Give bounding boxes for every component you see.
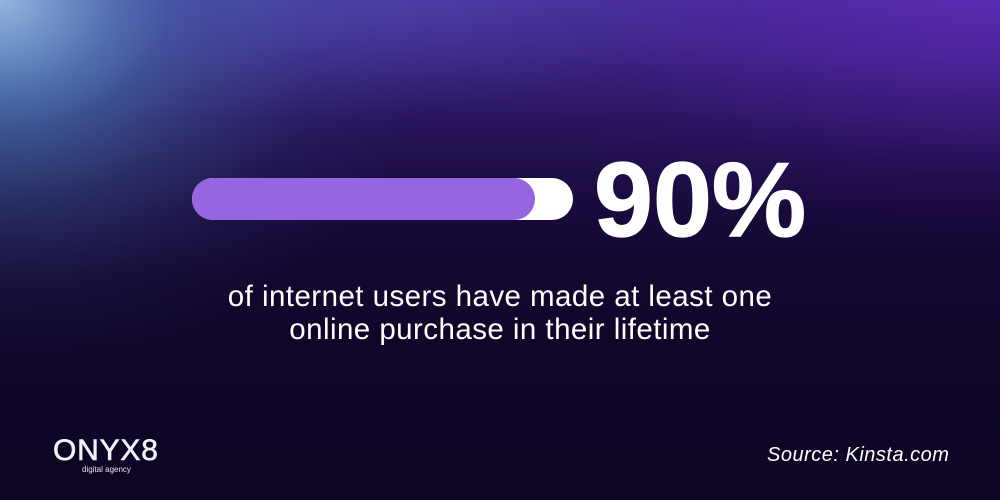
- logo: ONYX8 digital agency: [53, 434, 159, 474]
- description text: of internet users have made at least one: [228, 280, 772, 313]
- bar track: [192, 178, 573, 220]
- source note: Source: Kinsta.com: [767, 444, 949, 466]
- progress bar: [192, 178, 573, 220]
- bar fill 90%: [192, 178, 535, 220]
- big number: 90%: 90%: [594, 141, 806, 259]
- description text: online purchase in their lifetime: [289, 313, 711, 346]
- logo tagline: digital agency: [82, 465, 131, 474]
- logo wordmark: ONYX8: [53, 434, 159, 467]
- description text: [228, 280, 772, 346]
